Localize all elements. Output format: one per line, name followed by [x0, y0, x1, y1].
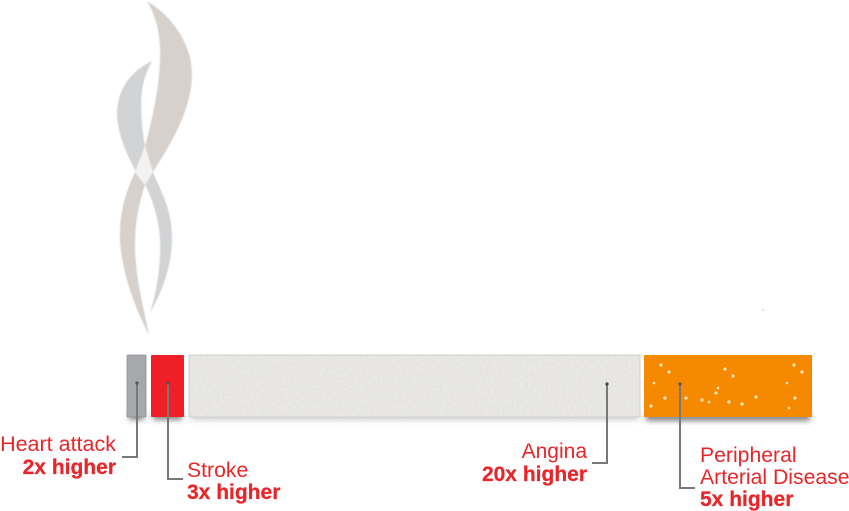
- cigarette: orange filter with speckles: [644, 355, 812, 417]
- label: angina: 20x higher: [482, 463, 587, 486]
- label: stroke: [187, 459, 280, 504]
- smoke: [117, 1, 192, 335]
- smoke: lower tan wisp: [120, 172, 149, 335]
- cigarette shadow: [129, 412, 810, 421]
- label: heart attack: 2x higher: [23, 456, 116, 479]
- label: peripheral arterial disease: 5x higher: [700, 488, 793, 511]
- leader: peripheral arterial disease: [678, 382, 695, 488]
- label: peripheral arterial disease: [700, 444, 849, 511]
- label: heart attack: [0, 432, 116, 479]
- label: peripheral arterial disease: Peripheral: [700, 444, 797, 467]
- label: angina: [482, 440, 587, 486]
- label: stroke: Stroke: [187, 459, 248, 482]
- label: heart attack: Heart attack: [0, 432, 116, 456]
- faint speck: [762, 309, 764, 311]
- cigarette: grey band: [127, 355, 146, 417]
- label: peripheral arterial disease: Arterial Disease: [700, 466, 849, 489]
- leader: stroke: [166, 381, 183, 479]
- cigarette: red band: [151, 355, 184, 417]
- leader: angina: [592, 382, 609, 463]
- smoke: upper grey wisp: [117, 61, 152, 172]
- smoke: centre diamond: [135, 146, 153, 185]
- label: stroke: 3x higher: [187, 481, 280, 504]
- smoke: lower grey wisp: [145, 172, 172, 313]
- cigarette: paper body: [189, 355, 640, 417]
- smoke: upper tan wisp: [145, 1, 192, 172]
- leader: heart attack: [122, 381, 139, 457]
- label: angina: Angina: [522, 440, 587, 463]
